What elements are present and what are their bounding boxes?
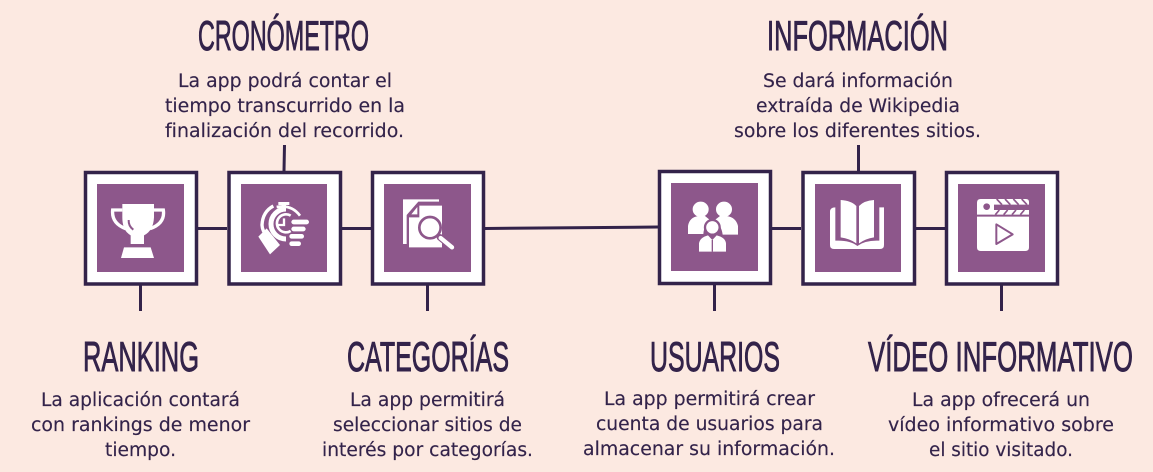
usuarios icon box (660, 172, 770, 284)
text: categorias description (322, 390, 533, 461)
text: informacion description: extraída de Wikipedia (756, 96, 960, 117)
panel: categorias (322, 172, 533, 461)
cronometro icon box (229, 172, 340, 284)
video icon box (946, 172, 1058, 284)
panel: cronometro (165, 12, 405, 284)
text: informacion description (734, 71, 981, 142)
text: informacion description: Se dará información (763, 71, 953, 92)
icon: clapperboard with play (977, 199, 1029, 251)
categorias icon box (372, 172, 484, 284)
heading: categorias: CATEGORÍAS (347, 333, 509, 380)
text: video description (888, 390, 1114, 461)
icon: group of users (688, 202, 738, 252)
panel: usuarios (583, 172, 835, 460)
text: usuarios description: La app permitirá crear (604, 389, 815, 410)
heading: cronometro: CRONÓMETRO (198, 12, 369, 59)
text: informacion description: sobre los diferentes sitios. (734, 121, 981, 142)
text: usuarios description (583, 389, 835, 460)
text: ranking description: tiempo. (105, 440, 176, 461)
text: categorias description: interés por categorías. (322, 440, 533, 461)
text: video description: vídeo informativo sobre (888, 415, 1114, 436)
heading: usuarios: USUARIOS (650, 333, 780, 380)
icon: open book (830, 200, 884, 249)
icon: document with magnifier (403, 199, 452, 247)
informacion icon box (803, 172, 914, 284)
panel: ranking (31, 172, 250, 461)
text: cronometro description: La app podrá contar el (178, 71, 392, 92)
text: ranking description: con rankings de menor (31, 415, 250, 436)
heading: informacion: INFORMACIÓN (767, 12, 948, 59)
text: categorias description: La app permitirá (350, 390, 505, 411)
text: usuarios description: almacenar su información. (583, 439, 835, 460)
text: categorias description: seleccionar sitios de (333, 415, 522, 436)
ranking icon box (86, 172, 196, 284)
panel: informacion (734, 12, 981, 284)
icon: stopwatch in hand (258, 202, 307, 254)
icon: trophy (113, 204, 164, 258)
text: ranking description: La aplicación contará (41, 390, 240, 411)
text: cronometro description: tiempo transcurrido en la (165, 96, 405, 117)
text: video description: La app ofrecerá un (912, 390, 1090, 411)
text: ranking description (31, 390, 250, 461)
text: usuarios description: cuenta de usuarios para (596, 414, 823, 435)
heading: ranking: RANKING (83, 333, 199, 380)
panel: video informativo (868, 172, 1133, 461)
text: video description: el sitio visitado. (929, 440, 1073, 461)
text: cronometro description (165, 71, 405, 142)
text: cronometro description: finalización del recorrido. (165, 121, 404, 142)
